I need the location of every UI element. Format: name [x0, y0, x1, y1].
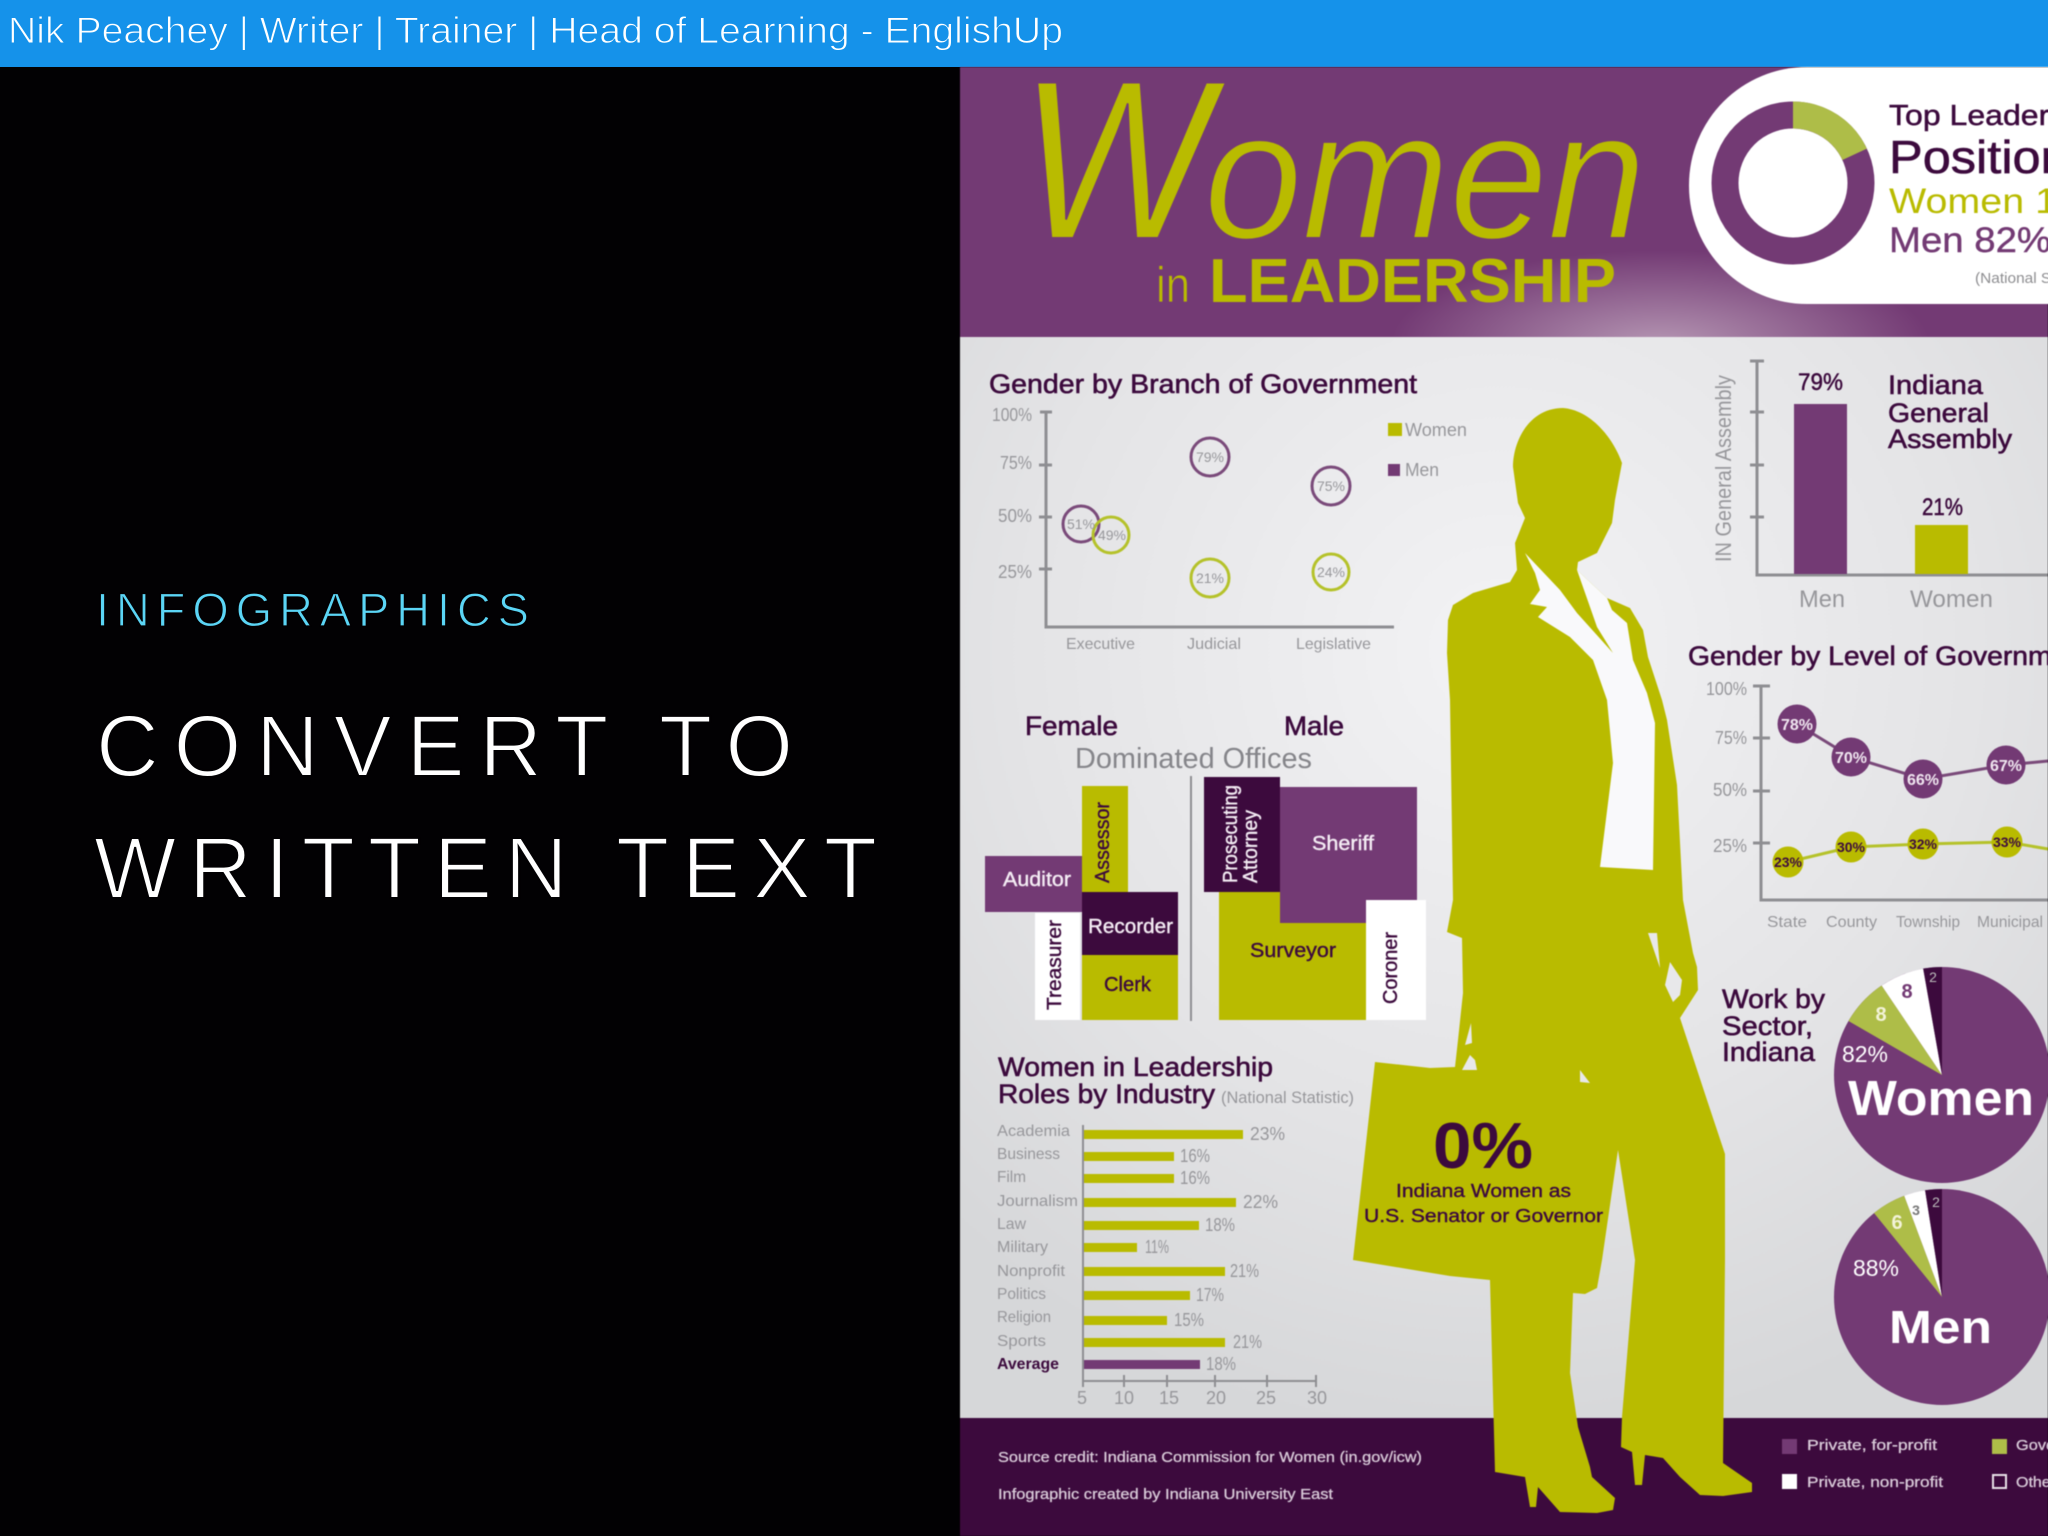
bag statistic: U.S. Senator or Governor	[1364, 1206, 1603, 1226]
legend: Women	[1405, 420, 1467, 440]
bar values: 22%	[1243, 1192, 1278, 1212]
chart: Indiana General Assembly	[1711, 361, 2048, 613]
title: Women in Leadership: omen	[1204, 73, 1646, 277]
left black panel	[0, 67, 960, 1536]
female blocks: Clerk	[1104, 974, 1152, 996]
pie: women	[1834, 967, 2048, 1183]
circle values: 21%	[1196, 570, 1224, 586]
y labels: 100%	[1706, 679, 1747, 699]
women series	[1772, 826, 2048, 878]
women series: 33%	[1993, 834, 2022, 850]
category labels	[1066, 636, 1371, 653]
female blocks: Assessor	[1092, 802, 1114, 883]
badge: top leadership positions: Men 82%	[1889, 221, 2048, 260]
pie: men: Men	[1889, 1301, 1992, 1353]
banner glow	[1390, 250, 1930, 337]
bar values: 21%	[1233, 1332, 1262, 1352]
male blocks: Attorney	[1240, 810, 1262, 883]
title: Women in Leadership: in	[1156, 257, 1190, 313]
top header bar	[0, 0, 2048, 67]
footer credits: Source credit: Indiana Commission for Women (in.gov/icw)	[998, 1449, 1422, 1466]
female blocks: Auditor	[1003, 869, 1071, 891]
y labels: 50%	[1713, 780, 1747, 800]
chart: gender by branch of government	[989, 369, 1467, 653]
footer credits: Infographic created by Indiana University East	[998, 1486, 1334, 1503]
category labels: Sports	[997, 1333, 1046, 1350]
category labels: Politics	[997, 1286, 1046, 1303]
heading: Gender by Branch of Government	[989, 369, 1418, 399]
values: 21%	[1922, 494, 1963, 521]
y labels: 75%	[1000, 453, 1032, 473]
bag statistic	[1364, 1109, 1603, 1226]
heading: Roles by Industry	[998, 1079, 1216, 1109]
footer band	[960, 1418, 2048, 1536]
category labels: Men	[1799, 586, 1845, 613]
bar values: 23%	[1250, 1124, 1285, 1144]
rotated axis label: IN General Assembly	[1711, 375, 1736, 562]
heading	[1888, 370, 2013, 454]
chart: gender by level of government	[1688, 641, 2048, 931]
bar values: 15%	[1174, 1310, 1204, 1330]
y labels: 100%	[992, 405, 1032, 425]
category labels: Legislative	[1296, 636, 1371, 653]
y labels: 25%	[998, 562, 1032, 582]
category labels	[1799, 586, 1993, 613]
main heading: CONVERT TO	[96, 698, 793, 795]
axes	[1750, 361, 2048, 575]
light background panel	[960, 337, 2048, 1419]
female blocks: Recorder	[1088, 916, 1173, 938]
values: 79%	[1798, 369, 1843, 396]
sector legend: Private, non-profit	[1807, 1474, 1944, 1491]
category labels	[997, 1123, 1078, 1373]
category labels: Law	[997, 1216, 1026, 1233]
pie: men: 6	[1891, 1212, 1903, 1234]
category labels: Academia	[997, 1123, 1070, 1140]
heading: Indiana	[1888, 370, 1984, 400]
bar: women	[1915, 525, 1968, 574]
heading: Work by	[1722, 984, 1826, 1014]
heading: (National Statistic)	[1221, 1088, 1354, 1107]
axes	[1083, 1125, 1317, 1387]
woman silhouette with bag	[1353, 408, 1752, 1513]
category labels: Journalism	[997, 1193, 1078, 1210]
chart: work by sector, Indiana	[1722, 967, 2048, 1491]
legend	[1388, 420, 1467, 480]
pie: women: 8	[1901, 981, 1913, 1003]
headings: Male	[1284, 711, 1344, 741]
category labels: State	[1767, 914, 1807, 931]
axes	[1753, 686, 2048, 900]
y labels	[1706, 679, 1747, 856]
male blocks: Prosecuting	[1220, 785, 1242, 883]
data circles	[1063, 438, 1350, 597]
title: Women in Leadership: LEADERSHIP	[1209, 247, 1616, 316]
bars	[1084, 1130, 1243, 1369]
bar values: 18%	[1205, 1215, 1235, 1235]
main heading: WRITTEN TEXT	[94, 820, 877, 917]
category labels: Nonprofit	[997, 1263, 1066, 1280]
title: Women in Leadership: W	[1020, 33, 1227, 286]
x axis labels: 10	[1114, 1388, 1134, 1408]
y labels: 25%	[1713, 836, 1747, 856]
sector legend: Private, for-profit	[1807, 1437, 1938, 1454]
category labels: Military	[997, 1239, 1048, 1256]
category labels: Women	[1910, 586, 1993, 613]
circle values: 49%	[1098, 527, 1126, 543]
x axis labels: 25	[1256, 1388, 1276, 1408]
circle values: 24%	[1317, 564, 1345, 580]
category labels: Judicial	[1187, 636, 1241, 653]
bar values: 16%	[1180, 1146, 1210, 1166]
female blocks: Treasurer	[1044, 920, 1066, 1010]
category labels: County	[1826, 914, 1877, 931]
x axis labels: 15	[1159, 1388, 1179, 1408]
axes	[1039, 412, 1394, 627]
category labels: Business	[997, 1146, 1060, 1163]
headings: Female	[1025, 711, 1118, 741]
category labels: Average	[997, 1356, 1059, 1373]
men series	[1778, 704, 2048, 798]
women series: 30%	[1837, 839, 1866, 855]
pie: women: 2	[1929, 969, 1937, 985]
category labels: Township	[1896, 914, 1960, 931]
pie: men: 88%	[1853, 1255, 1899, 1281]
bag statistic: 0%	[1433, 1109, 1533, 1182]
x axis labels: 5	[1077, 1388, 1087, 1408]
bar values	[1145, 1124, 1285, 1374]
female blocks	[985, 786, 1178, 1020]
main heading	[94, 698, 877, 917]
top header bar: Nik Peachey | Writer | Trainer | Head of Learning - EnglishUp	[8, 10, 1063, 51]
pie: men: 3	[1912, 1202, 1920, 1218]
gaps at arm and hand	[1462, 933, 1682, 1083]
legend: Men	[1405, 460, 1439, 480]
y labels: 50%	[998, 506, 1032, 526]
sector legend	[1782, 1437, 2048, 1491]
heading: Sector,	[1722, 1011, 1813, 1041]
bar values: 16%	[1180, 1168, 1210, 1188]
heading: General	[1888, 398, 1989, 428]
circle values	[1067, 449, 1345, 586]
male blocks: Sheriff	[1312, 833, 1374, 855]
male blocks: Coroner	[1380, 932, 1402, 1004]
bar values: 17%	[1196, 1285, 1224, 1305]
white shirt and collar	[1525, 553, 1655, 870]
purple title banner	[960, 67, 2048, 337]
bar values: 11%	[1145, 1237, 1169, 1257]
men series: 67%	[1990, 758, 2022, 775]
circle values: 75%	[1317, 478, 1345, 494]
heading: Indiana	[1722, 1037, 1816, 1067]
bar values: 21%	[1230, 1261, 1259, 1281]
pie: men	[1834, 1189, 2048, 1405]
heading	[998, 1052, 1354, 1109]
headings: Dominated Offices	[1075, 743, 1312, 775]
bar values: 18%	[1206, 1354, 1236, 1374]
male blocks: Surveyor	[1250, 940, 1336, 962]
donut chart	[1725, 115, 1861, 251]
values	[1798, 369, 1963, 521]
men series: 70%	[1835, 750, 1867, 767]
category labels	[1767, 914, 2043, 931]
men series: 78%	[1781, 717, 1813, 734]
x axis labels: 30	[1307, 1388, 1327, 1408]
chart: female and male dominated offices	[985, 711, 1426, 1021]
infographic	[960, 33, 2048, 1536]
y labels	[992, 405, 1032, 582]
category labels: Municipal	[1977, 914, 2043, 931]
male blocks	[1204, 777, 1426, 1020]
pie: women: Women	[1848, 1072, 2034, 1126]
category labels: Executive	[1066, 636, 1135, 653]
x axis labels	[1077, 1388, 1327, 1408]
pie: women: 82%	[1842, 1041, 1888, 1067]
category labels: Film	[997, 1169, 1026, 1186]
circle values: 79%	[1196, 449, 1224, 465]
x axis labels: 20	[1206, 1388, 1226, 1408]
category labels: Religion	[997, 1309, 1051, 1326]
bar: men	[1794, 404, 1847, 574]
women series: 32%	[1909, 836, 1938, 852]
eyebrow label: INFOGRAPHICS	[96, 583, 529, 636]
women series: 23%	[1774, 854, 1803, 870]
circle values: 51%	[1067, 516, 1095, 532]
footer credits	[998, 1449, 1422, 1503]
badge: top leadership positions	[1689, 67, 2048, 304]
heading: Assembly	[1888, 424, 2013, 454]
heading: Women in Leadership	[998, 1052, 1273, 1082]
pie: women: 8	[1875, 1004, 1887, 1026]
headings	[1025, 711, 1344, 775]
y labels: 75%	[1715, 728, 1747, 748]
men series: 66%	[1907, 772, 1939, 789]
pie: men: 2	[1932, 1194, 1940, 1210]
title: Women in Leadership	[1020, 33, 1646, 316]
chart: women in leadership roles by industry	[997, 1052, 1354, 1408]
bag statistic: Indiana Women as	[1396, 1181, 1571, 1201]
heading	[1722, 984, 1826, 1067]
